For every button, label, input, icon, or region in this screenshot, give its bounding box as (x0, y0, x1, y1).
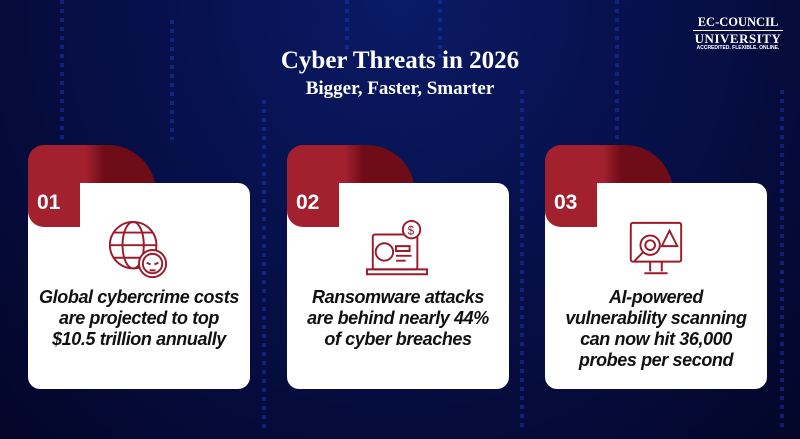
title: Cyber Threats in 2026 (281, 47, 519, 74)
logo: EC-COUNCIL (698, 15, 778, 29)
logo: ACCREDITED. FLEXIBLE. ONLINE. (697, 45, 779, 51)
icon: globe with skull (108, 221, 168, 278)
panel: card 3 (545, 145, 767, 389)
title: Bigger, Faster, Smarter (306, 78, 494, 99)
text: can now hit 36,000 (580, 329, 732, 349)
icon: laptop ransomware (366, 220, 428, 276)
number 02: 02 (296, 191, 319, 214)
number 01: 01 (37, 191, 60, 214)
logo: UNIVERSITY (695, 31, 781, 46)
panel: card 2 (287, 145, 509, 389)
text (307, 287, 489, 349)
number 01 (28, 183, 80, 227)
icon: monitor scan (630, 222, 682, 274)
text (39, 287, 239, 349)
text: AI-powered (609, 287, 703, 307)
panel: card 1 (28, 145, 250, 389)
text: probes per second (579, 350, 733, 370)
number 03 (545, 183, 597, 227)
icon: laptop ransomware: $ (408, 224, 415, 237)
text (565, 287, 747, 370)
logo (693, 15, 783, 51)
text: vulnerability scanning (565, 308, 747, 328)
number 02 (287, 183, 339, 227)
text: $10.5 trillion annually (52, 329, 226, 349)
title (281, 47, 519, 99)
number 03: 03 (554, 191, 577, 214)
text: of cyber breaches (324, 329, 472, 349)
text: Ransomware attacks (312, 287, 484, 307)
text: are projected to top (59, 308, 219, 328)
text: are behind nearly 44% (307, 308, 489, 328)
text: Global cybercrime costs (39, 287, 239, 307)
